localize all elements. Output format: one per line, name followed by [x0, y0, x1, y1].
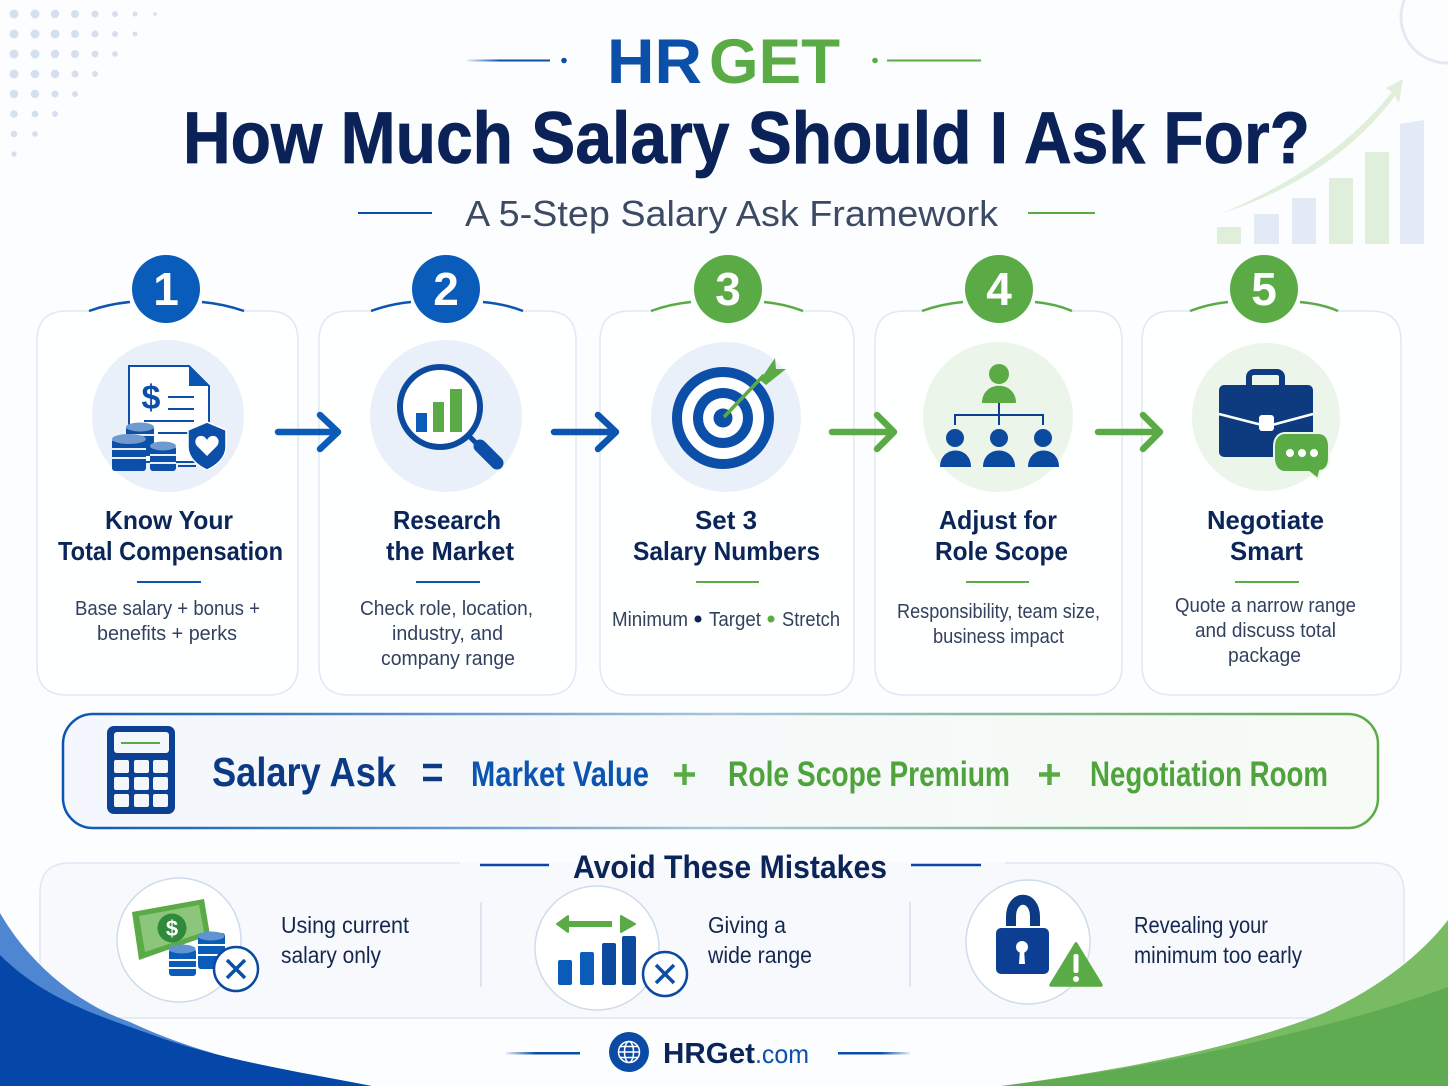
heading: Know Your: [105, 505, 233, 535]
description: Stretch: [782, 609, 840, 631]
heading: Salary Numbers: [633, 536, 820, 566]
heading: [58, 505, 283, 566]
panel: step 1: [37, 255, 298, 695]
badge 4: 4: [986, 263, 1012, 315]
footer: .com: [755, 1039, 809, 1069]
heading: Role Scope: [935, 536, 1068, 566]
panel: step 5: [1142, 255, 1401, 695]
heading: Set 3: [695, 505, 757, 535]
arrow: step 2 to 3: [554, 415, 616, 449]
icon: compensation document with coins and shield: [92, 340, 244, 492]
mistake 3 text: minimum too early: [1134, 942, 1302, 968]
description: industry, and: [392, 623, 503, 645]
mistake 2 text: Giving a: [708, 912, 786, 938]
badge 2: 2: [433, 263, 459, 315]
title: How Much Salary Should I Ask For?: [183, 98, 1310, 179]
badge 5: 5: [1251, 263, 1277, 315]
mistake 3 text: Revealing your: [1134, 912, 1268, 938]
description: benefits + perks: [97, 623, 237, 645]
icon: magnifier with bars: [370, 340, 522, 492]
description: [360, 598, 533, 670]
decorative corner ring: [1401, 0, 1448, 63]
description: Base salary + bonus +: [75, 598, 260, 620]
heading: Avoid These Mistakes: [573, 849, 887, 885]
panel: salary ask formula: [63, 714, 1378, 828]
heading: [1207, 505, 1324, 566]
heading: [386, 505, 514, 566]
icon: target with arrow: [651, 342, 801, 492]
heading: Smart: [1230, 536, 1303, 566]
subtitle: A 5-Step Salary Ask Framework: [465, 193, 999, 234]
panel: step 4: [875, 255, 1122, 695]
description: Minimum: [612, 609, 688, 631]
icon: compensation document with coins and shield: $: [142, 379, 161, 417]
website: HRGet: [663, 1038, 755, 1070]
mistake 3 text: [1134, 912, 1302, 968]
decorative dot grid: [10, 10, 157, 157]
mistake 2 text: wide range: [707, 942, 812, 968]
bottom wave: green: [1001, 920, 1448, 1086]
bottom wave: blue: [0, 913, 372, 1086]
icon: globe: [609, 1032, 649, 1072]
logo: HR: [607, 27, 702, 97]
decorative growth chart: [1217, 79, 1424, 244]
formula text: Role Scope Premium: [728, 755, 1010, 794]
icon: team hierarchy: [923, 342, 1073, 492]
icon: briefcase with chat bubble: [1192, 343, 1340, 491]
description: Check role, location,: [360, 598, 533, 620]
badge 5: [1230, 255, 1298, 323]
description: Target: [709, 609, 761, 631]
heading: Total Compensation: [58, 536, 283, 566]
badge 3: [694, 255, 762, 323]
logo: [467, 27, 981, 97]
arrow: step 3 to 4: [832, 415, 894, 449]
badge 4: [965, 255, 1033, 323]
mistake 1 text: [281, 912, 410, 968]
formula text: Salary Ask: [212, 749, 396, 795]
heading: the Market: [386, 536, 514, 566]
heading: [935, 505, 1068, 566]
formula text: Market Value: [471, 755, 649, 794]
mistake 2 text: [707, 912, 812, 968]
badge 2: [412, 255, 480, 323]
description: and discuss total: [1195, 620, 1336, 642]
mistake 1 text: salary only: [281, 942, 381, 968]
arrow: step 4 to 5: [1098, 415, 1160, 449]
arrow: step 1 to 2: [278, 415, 338, 449]
formula text: [212, 749, 1328, 795]
footer: [506, 1032, 910, 1072]
heading: Adjust for: [939, 505, 1057, 535]
panel: step 3: [600, 255, 854, 695]
panel: step 2: [319, 255, 576, 695]
badge 1: [132, 255, 200, 323]
logo: GET: [709, 27, 840, 97]
formula text: Negotiation Room: [1090, 755, 1328, 794]
mistake 1 text: Using current: [281, 912, 410, 938]
badge 1: 1: [153, 263, 179, 315]
description: Responsibility, team size,: [897, 601, 1100, 623]
mistake 3 icon: lock with warning: [966, 880, 1101, 1004]
description: [1175, 595, 1356, 667]
badge 3: 3: [715, 263, 741, 315]
description: [897, 601, 1100, 648]
description: [612, 609, 840, 631]
description: Quote a narrow range: [1175, 595, 1356, 617]
heading: Negotiate: [1207, 505, 1324, 535]
description: business impact: [933, 626, 1064, 648]
panel: avoid these mistakes: [40, 849, 1404, 1018]
heading: [633, 505, 820, 566]
mistake 1 icon: cash and coins: [117, 878, 258, 1002]
description: package: [1228, 645, 1301, 667]
mistake 1 icon: cash and coins: $: [166, 916, 178, 941]
icon: calculator: [107, 726, 175, 814]
description: company range: [381, 648, 515, 670]
description: [75, 598, 260, 645]
heading: Research: [393, 505, 501, 535]
mistake 2 icon: wide range bars: [535, 886, 687, 1010]
